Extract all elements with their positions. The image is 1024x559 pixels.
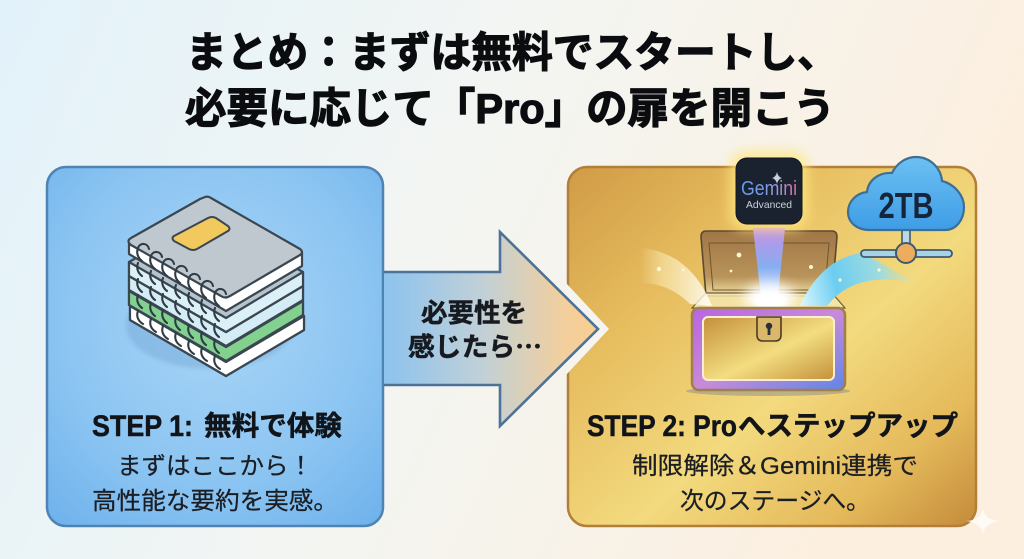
step 1 heading: 無料で体験 <box>204 410 343 441</box>
step 1 heading: STEP 1: <box>92 410 193 443</box>
arrow label: 必要性を <box>421 298 527 328</box>
icon: 2TB cloud: 2TB <box>878 185 934 226</box>
step 2 description: 次のステージへ。 <box>680 488 870 515</box>
icon: treasure chest <box>640 228 925 396</box>
step 2 heading <box>587 410 958 443</box>
left light stream <box>640 248 712 306</box>
icon: gemini advanced badge: Gemini <box>741 178 797 200</box>
chest shadow <box>686 386 850 396</box>
step 2 heading: へステップアップ <box>738 410 958 441</box>
panel: step 1 <box>47 167 383 526</box>
chest lock <box>757 317 781 341</box>
right light stream <box>800 253 925 306</box>
icon: sparkle watermark <box>966 508 1000 535</box>
step 1 description: 高性能な要約を実感。 <box>92 488 338 515</box>
step 2 description: 制限解除＆Gemini連携で <box>632 453 918 480</box>
step 1 heading <box>92 410 343 443</box>
step 2 description <box>632 453 918 515</box>
step 1 description <box>92 453 338 515</box>
title: まとめ：まずは無料でスタートし、 <box>186 29 838 76</box>
title: 必要に応じて「Pro」の扉を開こう <box>185 85 835 132</box>
icon: 2TB cloud <box>848 157 964 263</box>
notebook spiral rings <box>137 244 226 369</box>
step 2 heading: STEP 2: Pro <box>587 410 737 443</box>
icon: gemini advanced badge: Advanced <box>746 199 792 211</box>
icon: gemini advanced badge <box>730 152 808 230</box>
light beam <box>753 228 785 306</box>
chest body <box>692 308 845 390</box>
sparkles <box>657 253 881 282</box>
arrow label: 感じたら… <box>408 327 542 364</box>
arrow label <box>408 298 542 364</box>
chest panel <box>703 317 834 380</box>
title <box>185 29 838 132</box>
notebook label plate <box>172 217 230 250</box>
arrow <box>384 232 609 426</box>
chest lid <box>701 231 837 296</box>
icon: notebook stack <box>126 197 304 376</box>
panel: step 2 <box>568 152 976 526</box>
step 1 description: まずはここから！ <box>117 453 313 480</box>
